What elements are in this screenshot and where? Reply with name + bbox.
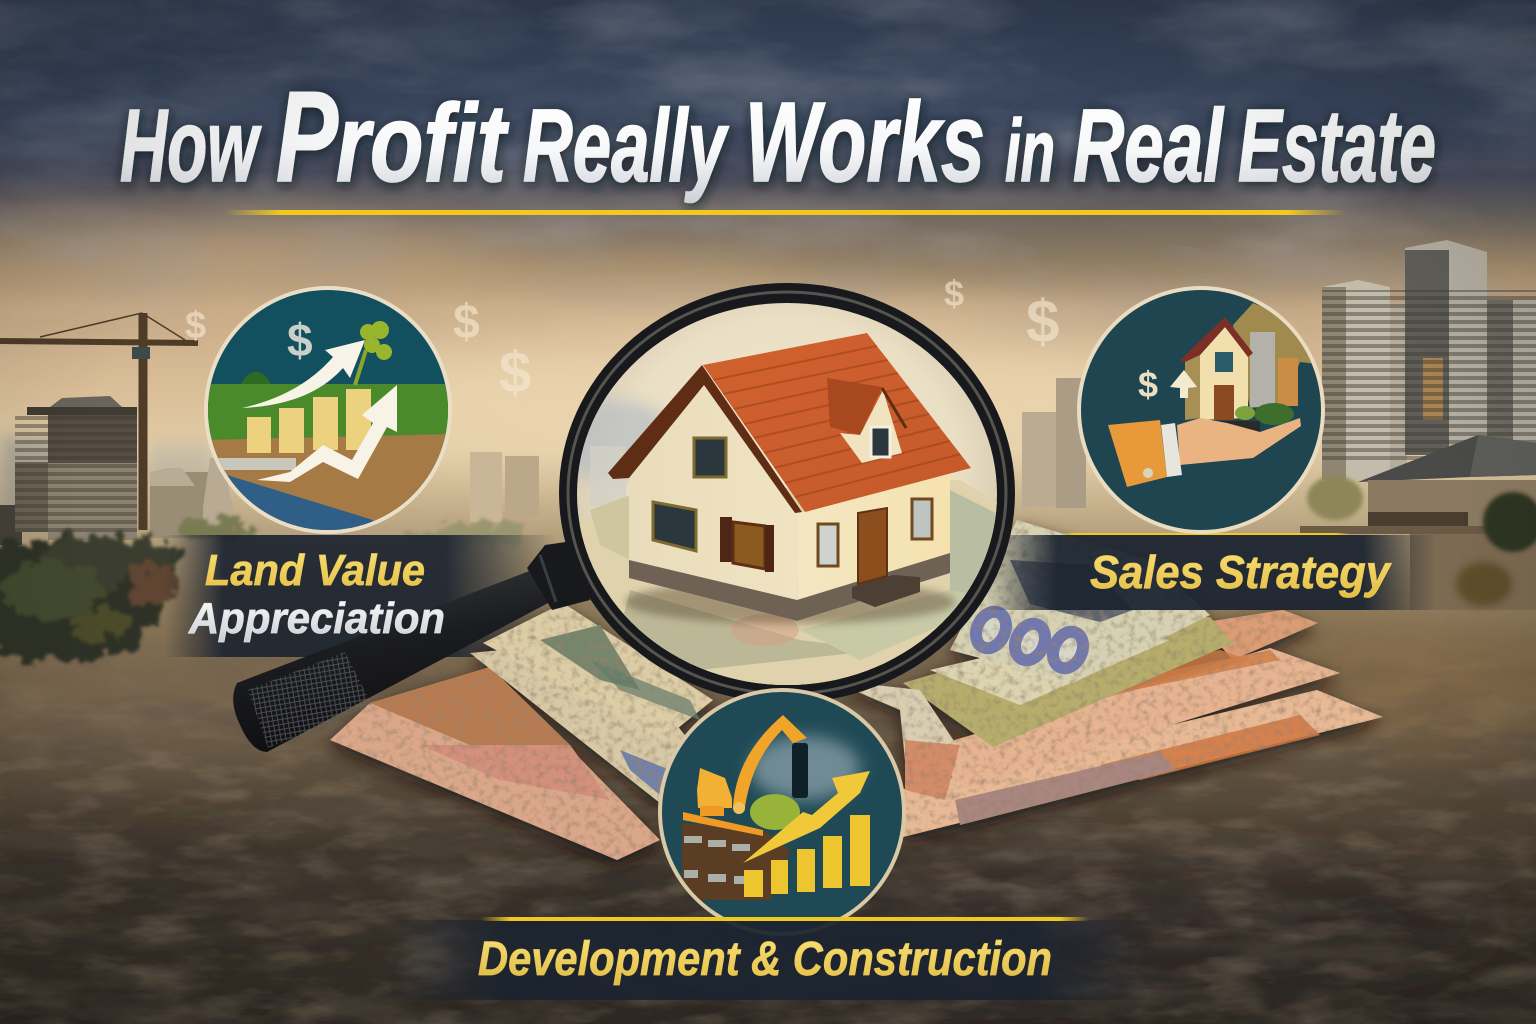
- label: sales strategy: Sales Strategy: [1090, 546, 1392, 598]
- badge: land value appreciation: $: [287, 314, 313, 366]
- label: development and construction: [385, 917, 1155, 1000]
- dollar signs floating: $: [944, 273, 964, 314]
- notes: left fan: [330, 603, 960, 860]
- trees: left foreground: [0, 518, 530, 662]
- dollar signs floating: [185, 273, 1059, 405]
- magnifying glass handle: [233, 540, 590, 752]
- big zeros on banknote: [970, 607, 1089, 673]
- skyline: right towers and villa: [1022, 240, 1536, 610]
- scene inside lens: [578, 395, 997, 685]
- title: Real: [1073, 88, 1225, 203]
- badge: land value appreciation: [204, 286, 455, 538]
- dollar signs floating: $: [499, 340, 531, 405]
- title: rofit: [336, 82, 509, 205]
- dollar signs floating: $: [453, 296, 480, 349]
- label band: land value: [165, 535, 555, 657]
- dollar signs floating: $: [1026, 288, 1059, 355]
- title underline: [225, 210, 1345, 215]
- label: land value appreciation: Appreciation: [188, 594, 445, 643]
- house: [608, 333, 971, 621]
- title: Really: [523, 88, 729, 203]
- label: development and construction: Development & Construction: [478, 933, 1052, 986]
- label: land value appreciation: Land Value: [205, 546, 425, 595]
- badge: sales strategy: $: [1138, 364, 1158, 405]
- title: Works: [745, 79, 985, 205]
- title: P: [276, 65, 339, 209]
- title: in: [1005, 101, 1055, 200]
- title: [120, 65, 1436, 209]
- label: land value appreciation: [188, 546, 445, 643]
- magnifying glass lens and house: [540, 283, 1015, 703]
- badge: development and construction: [658, 688, 906, 936]
- badge: sales strategy: [1077, 286, 1328, 536]
- label band: sales strategy: [985, 533, 1435, 610]
- stack of banknotes: [330, 520, 1383, 860]
- skyline: left, crane and tower under construction: [0, 313, 539, 662]
- title: How: [120, 88, 262, 203]
- notes: right fan: [900, 520, 1383, 837]
- dollar signs floating: $: [185, 305, 206, 347]
